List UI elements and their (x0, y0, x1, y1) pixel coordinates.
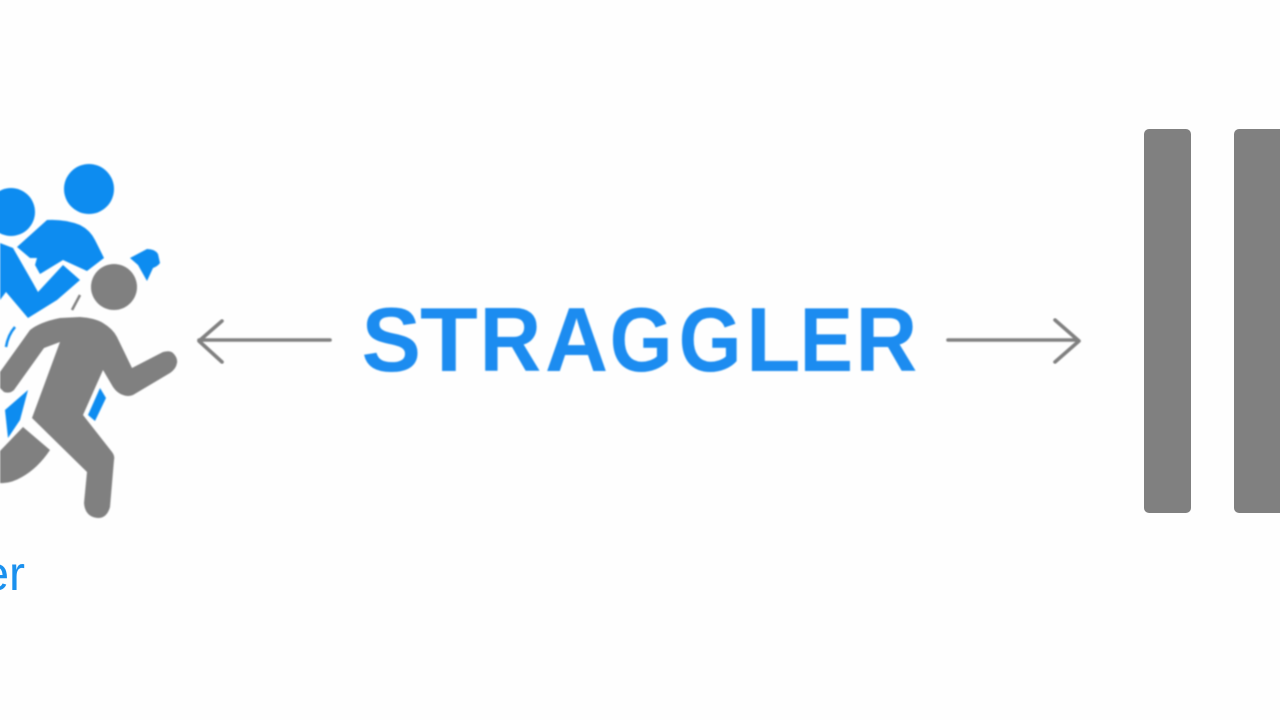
title: E (800, 289, 853, 391)
bar: left (1144, 129, 1191, 513)
title: G (679, 290, 742, 391)
icon: blue runner back head (64, 164, 114, 214)
title: G (610, 290, 673, 391)
title: R (856, 289, 917, 391)
arrow: right (948, 320, 1079, 362)
bar: right (1234, 129, 1280, 513)
icon: gray runner head (91, 264, 137, 310)
icon: blue runner back torso (17, 220, 104, 274)
icon: blue shard right (88, 388, 106, 421)
icon: blue runner front body (0, 243, 80, 318)
icon: group of runners (0, 164, 177, 518)
icon: blue shard left (5, 390, 28, 438)
icon: blue runner hand (130, 249, 160, 281)
icon: gray sliver (72, 295, 80, 310)
title: T (420, 289, 478, 391)
title: R (480, 289, 541, 391)
icon: gray runner body (0, 317, 177, 518)
icon: blue sliver (6, 327, 15, 347)
title: S (362, 289, 421, 391)
title: A (545, 288, 608, 390)
icon: gray runner back leg (0, 427, 50, 483)
arrow: left (199, 321, 330, 362)
title: L (746, 289, 800, 391)
title (362, 288, 917, 391)
icon: blue runner front head (0, 188, 35, 236)
